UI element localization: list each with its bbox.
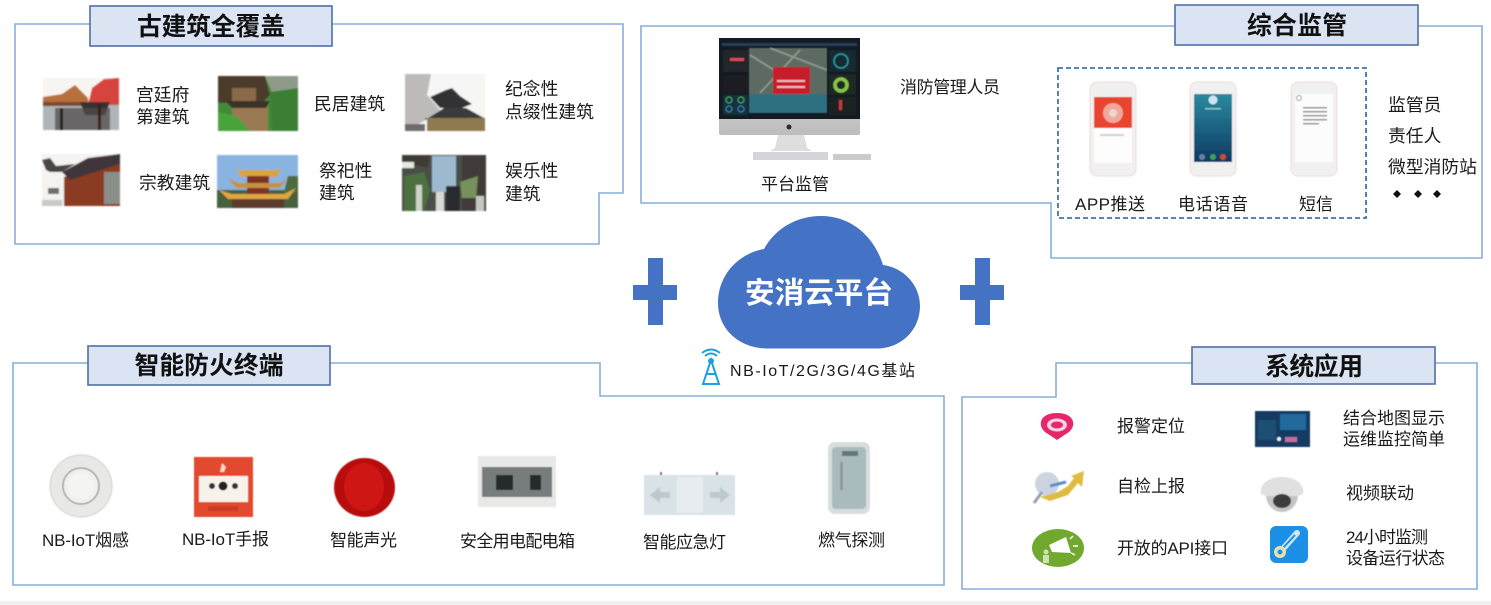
labels: terminal names: NB-IoT手报 [182,530,269,549]
photo: residence [218,76,298,131]
icon: desktop monitor with dashboard [719,38,871,160]
icon: red sound and light alarm [334,458,395,517]
photo: religious building [42,154,120,206]
plus sign left [633,258,677,325]
photo: palace [43,78,119,130]
icon: electrical distribution box [478,456,556,507]
text: sacrificial buildings [319,161,372,203]
text: map display and simple monitoring: 结合地图显示 [1343,409,1445,428]
labels: terminal names: NB-IoT烟感 [42,531,129,550]
labels: terminal names: 安全用电配电箱 [460,532,575,551]
cloud platform: 安消云平台 [745,276,893,310]
list: notified roles [1388,95,1477,198]
icon: signal tower [702,350,720,384]
panel: integrated supervision [641,5,1482,258]
text: 24 hour monitoring [1346,528,1445,568]
icon: alarm location pin [1041,413,1073,440]
labels: terminal names: 智能声光 [330,531,397,550]
heading: system applications: 系统应用 [1265,352,1363,381]
labels: terminal names: 燃气探测 [818,531,885,550]
list: notified roles: 微型消防站 [1388,157,1477,177]
text: palace buildings: 第建筑 [136,107,190,127]
label: phone voice: 电话语音 [1178,195,1248,214]
text: sacrificial buildings: 建筑 [319,183,355,203]
heading: smart fire terminals [88,346,330,385]
icon: manual alarm button [194,457,253,517]
panel: ancient building coverage [15,6,623,244]
text: palace buildings [136,85,190,127]
heading: system applications [1192,347,1435,384]
heading: integrated supervision: 综合监管 [1247,12,1347,40]
text: memorial and decorative buildings: 点缀性建筑 [505,102,594,122]
panel: smart fire terminals [13,346,944,585]
text: palace buildings: 宫廷府 [136,85,189,105]
photo: entertainment building [402,155,486,211]
text: map display and simple monitoring: 运维监控简单 [1343,430,1445,449]
heading: ancient building coverage [90,6,332,46]
icon: phone with voice call [1190,82,1236,176]
text: memorial and decorative buildings: 纪念性 [505,78,558,99]
image: map display [1255,411,1310,447]
text: entertainment buildings: 娱乐性 [505,161,558,181]
icon: gas detector [828,442,870,514]
label: fire management personnel: 消防管理人员 [900,78,1000,97]
heading: ancient building coverage: 古建筑全覆盖 [137,13,285,41]
text: residential buildings: 民居建筑 [314,94,385,114]
text: 24 hour monitoring: 设备运行状态 [1346,549,1445,568]
icon: dome camera [1261,477,1303,512]
list: notified roles: 监管员 [1388,95,1441,115]
text: map display and simple monitoring [1343,409,1445,449]
label: platform supervision: 平台监管 [761,175,829,194]
text: alarm location: 报警定位 [1117,417,1185,436]
text: open api: 开放的API接口 [1117,539,1228,558]
photo: sacrificial building [217,155,298,208]
text: entertainment buildings [505,161,558,204]
labels: terminal names [42,530,885,552]
icon: emergency light [644,472,735,515]
plus sign right [960,258,1004,325]
text: video linkage: 视频联动 [1346,484,1414,503]
base station label: NB-IoT/2G/3G/4G基站 [730,362,915,380]
label: sms: 短信 [1299,195,1333,214]
cloud platform [718,216,920,348]
icon: smoke detector [50,455,112,517]
list: notified roles: 责任人 [1388,126,1442,146]
icon: phone with text message [1291,82,1337,176]
text: religious buildings: 宗教建筑 [139,173,210,193]
text: self check reporting: 自检上报 [1117,477,1185,496]
icon: phone with app push [1090,82,1136,176]
label: app push: APP推送 [1075,195,1145,214]
panel: system applications [962,347,1477,589]
heading: smart fire terminals: 智能防火终端 [134,352,284,380]
labels: terminal names: 智能应急灯 [643,533,726,552]
text: sacrificial buildings: 祭祀性 [319,161,372,181]
text: entertainment buildings: 建筑 [505,184,541,204]
icon: self check chart [1034,471,1084,503]
dashed box: notification channels [1058,68,1366,218]
base station label [702,350,915,384]
icon: green megaphone [1032,529,1084,567]
heading: integrated supervision [1175,5,1418,45]
text: 24 hour monitoring: 24小时监测 [1346,528,1428,547]
text: memorial and decorative buildings [505,78,594,122]
photo: memorial building [405,74,485,131]
icon: blue thermometer tile [1270,526,1308,563]
